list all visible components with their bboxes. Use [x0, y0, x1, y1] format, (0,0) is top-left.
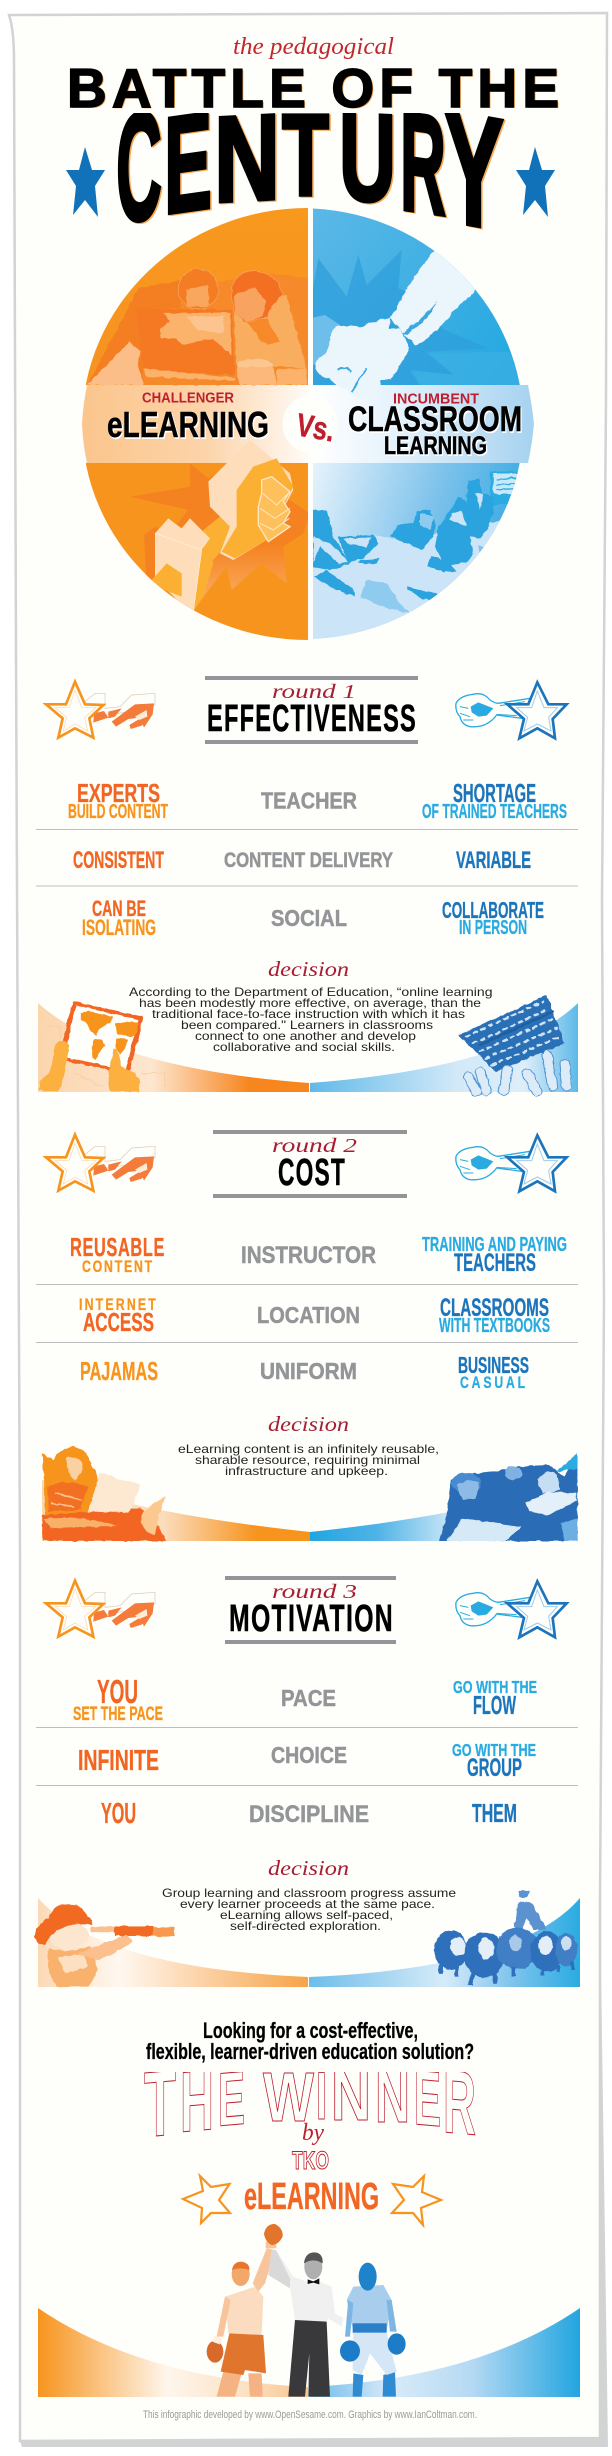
- decision text: [129, 985, 493, 1054]
- band: right: [312, 385, 534, 463]
- round 3: [34, 1576, 580, 1987]
- row: content delivery: CONSISTENT: [73, 847, 164, 874]
- row: pace: PACE: [281, 1685, 336, 1711]
- heading: century: T: [282, 90, 329, 220]
- row: teacher: EXPERTS: [77, 778, 160, 808]
- round 3 heading: round 3: [272, 1581, 357, 1603]
- row: uniform: PAJAMAS: [80, 1356, 158, 1386]
- decision text: Group learning and classroom progress assume: [162, 1886, 456, 1900]
- title block: [66, 34, 560, 266]
- tko label: TKO: [292, 2147, 329, 2175]
- row: social: COLLABORATE: [442, 897, 544, 923]
- round 1 heading: EFFECTIVENESS: [207, 698, 417, 740]
- row: discipline: [101, 1798, 517, 1830]
- heading: century: Y: [444, 77, 506, 266]
- decision 1 banner: [38, 957, 578, 1092]
- icon: tablet with world map: [39, 1003, 165, 1092]
- row: teacher: BUILD CONTENT: [68, 801, 168, 823]
- heading: the winner: [144, 2072, 476, 2136]
- row: location: ACCESS: [83, 1307, 154, 1337]
- icon: abacus and hands: [459, 995, 566, 1092]
- winner boxer: [207, 2224, 283, 2397]
- round 2 heading: round 2: [272, 1135, 357, 1157]
- icon: classroom star: [456, 1135, 567, 1191]
- round 2: [36, 1130, 578, 1541]
- quadrant: classroom students: [313, 463, 520, 639]
- incumbent label: INCUMBENT: [393, 392, 479, 408]
- row: location: [79, 1294, 550, 1337]
- heading: century: E: [164, 83, 212, 244]
- elearning label: eLEARNING: [108, 406, 270, 446]
- decision label: decision: [268, 1856, 349, 1880]
- call to action question: [146, 2018, 474, 2064]
- row: location: LOCATION: [257, 1302, 360, 1328]
- heading: century: Y: [443, 76, 504, 265]
- row: discipline: YOU: [101, 1798, 136, 1830]
- decision label: decision: [268, 957, 349, 981]
- versus circle: [80, 205, 540, 650]
- decision 3 banner: [34, 1856, 580, 1987]
- row: social: CAN BE: [92, 896, 146, 921]
- heading: century: E: [166, 84, 214, 245]
- illustration: referee and boxers: [207, 2224, 406, 2397]
- decision text: [162, 1886, 456, 1933]
- decision text: every learner proceeds at the same pace.: [180, 1897, 435, 1911]
- heading: the winner: T: [144, 2050, 176, 2157]
- row: pace: GO WITH THE: [453, 1677, 537, 1697]
- decision text: traditional face-to-face instruction with which it has: [152, 1007, 465, 1021]
- referee: [268, 2250, 343, 2397]
- learning label: LEARNING: [385, 434, 488, 462]
- row: uniform: CASUAL: [460, 1373, 528, 1392]
- decision text: [178, 1442, 439, 1478]
- heading: the winner: H: [180, 2052, 214, 2151]
- row: choice: INFINITE: [78, 1745, 159, 1777]
- round 1 heading: [205, 676, 418, 744]
- illustration: woman with laptop: [42, 1447, 167, 1541]
- decision text: been compared." Learners in classrooms: [181, 1018, 433, 1032]
- row: choice: GO WITH THE: [452, 1740, 536, 1760]
- quadrant: elearning chain fist: [80, 440, 310, 643]
- round 3 heading: [225, 1576, 396, 1644]
- heading: battle of the: BATTLE OF THE: [67, 57, 559, 119]
- illustration: child with spyglass: [34, 1904, 174, 1987]
- row: instructor: TEACHERS: [454, 1249, 536, 1277]
- decision text: collaborative and social skills.: [213, 1040, 395, 1054]
- divider line: [309, 206, 312, 642]
- heading: the winner: E: [218, 2056, 245, 2143]
- row: content delivery: [73, 847, 531, 874]
- decision text: eLearning allows self-paced,: [220, 1908, 393, 1922]
- row: pace: [73, 1673, 537, 1725]
- decision text: sharable resource, requiring minimal: [195, 1453, 420, 1467]
- quadrant: elearning laptop photo: [80, 205, 310, 385]
- row: uniform: BUSINESS: [458, 1352, 529, 1378]
- row: teacher: SHORTAGE: [453, 778, 536, 808]
- heading: century: [118, 113, 506, 230]
- by script: by: [302, 2120, 324, 2146]
- subtitle script: the pedagogical: [233, 34, 394, 60]
- decision text: connect to one another and develop: [195, 1029, 416, 1043]
- row: teacher: TEACHER: [261, 788, 357, 814]
- icon: left winner star: [183, 2176, 230, 2223]
- heading: century: C: [116, 77, 162, 257]
- heading: the winner: N: [331, 2057, 371, 2136]
- heading: battle of the: BATTLE OF THE: [68, 58, 560, 120]
- winner section: [38, 2018, 580, 2421]
- call to action question: Looking for a cost-effective,: [203, 2018, 418, 2043]
- quadrant: classroom fist: [313, 208, 520, 394]
- row: choice: CHOICE: [271, 1742, 347, 1768]
- row: instructor: INSTRUCTOR: [241, 1242, 376, 1269]
- icon: elearning star: [46, 682, 155, 738]
- decision text: eLearning content is an infinitely reusable,: [178, 1442, 439, 1456]
- round 1 heading: round 1: [272, 681, 356, 703]
- heading: the winner: R: [443, 2051, 476, 2155]
- decision label: decision: [268, 1412, 349, 1436]
- icon: right blue star: [516, 147, 555, 217]
- row: uniform: [80, 1352, 529, 1392]
- row: social: IN PERSON: [459, 917, 527, 939]
- heading: century: T: [284, 91, 330, 221]
- illustration: cattle and cowboy: [434, 1890, 577, 1985]
- row: uniform: UNIFORM: [260, 1358, 357, 1384]
- row: social: ISOLATING: [82, 915, 156, 940]
- decision text: self-directed exploration.: [230, 1919, 381, 1933]
- decision 2 banner: [42, 1412, 578, 1541]
- heading: century: C: [118, 78, 163, 258]
- decision text: has been modestly more effective, on average, than the: [139, 996, 481, 1010]
- heading: the winner: I: [316, 2058, 327, 2134]
- row: discipline: THEM: [472, 1798, 517, 1828]
- round 2 heading: [213, 1130, 407, 1198]
- heading: the winner: E: [414, 2053, 441, 2143]
- decision text: infrastructure and upkeep.: [225, 1464, 388, 1478]
- row: teacher: [68, 778, 567, 823]
- vs badge: Vs.: [294, 406, 337, 448]
- heading: the winner: N: [375, 2057, 410, 2138]
- row: discipline: DISCIPLINE: [249, 1801, 369, 1828]
- winner floor banner: [38, 2308, 580, 2397]
- row: instructor: CONTENT: [82, 1257, 154, 1276]
- learning label: LEARNING: [384, 432, 487, 460]
- round 1: [36, 676, 578, 1092]
- row: choice: GROUP: [467, 1754, 522, 1782]
- heading: century: U: [339, 86, 396, 229]
- heading: century: R: [400, 83, 446, 246]
- decision text: According to the Department of Education, “online learning: [129, 985, 493, 999]
- row: pace: SET THE PACE: [73, 1704, 163, 1725]
- heading: century: U: [340, 87, 397, 230]
- footer credit: This infographic developed by www.OpenSesame.com. Graphics by www.IanColtman.com.: [143, 2409, 477, 2421]
- row: pace: FLOW: [473, 1690, 516, 1720]
- band: left: [82, 385, 308, 463]
- row: choice: [78, 1740, 536, 1782]
- row: content delivery: CONTENT DELIVERY: [224, 849, 393, 872]
- row: pace: YOU: [97, 1673, 138, 1710]
- icon: classroom star: [456, 682, 567, 738]
- heading: century: R: [402, 84, 448, 247]
- challenger label: CHALLENGER: [142, 390, 234, 406]
- loser boxer: [340, 2263, 406, 2397]
- row: social: [82, 896, 544, 940]
- vs badge: [282, 396, 338, 452]
- icon: elearning star: [46, 1135, 155, 1191]
- row: content delivery: VARIABLE: [456, 847, 531, 874]
- row: social: SOCIAL: [271, 905, 347, 931]
- elearning label: eLEARNING: [107, 404, 269, 445]
- heading: the winner: W: [263, 2058, 314, 2136]
- icon: classroom star: [456, 1581, 567, 1637]
- row: instructor: [70, 1232, 567, 1277]
- icon: elearning star: [46, 1581, 155, 1637]
- round 3 heading: MOTIVATION: [229, 1598, 394, 1640]
- row: location: INTERNET: [79, 1295, 158, 1314]
- icon: right winner star: [392, 2176, 441, 2225]
- call to action question: flexible, learner-driven education solution?: [146, 2039, 474, 2064]
- round 2 heading: COST: [278, 1152, 346, 1194]
- classroom label: CLASSROOM: [348, 400, 522, 439]
- classroom label: CLASSROOM: [349, 402, 523, 440]
- row: instructor: REUSABLE: [70, 1232, 165, 1262]
- heading: century: N: [216, 89, 282, 229]
- illustration: students at desks: [439, 1453, 577, 1541]
- icon: left blue star: [66, 147, 105, 217]
- heading: century: N: [214, 88, 280, 228]
- elearning winner label: eLEARNING: [244, 2176, 379, 2218]
